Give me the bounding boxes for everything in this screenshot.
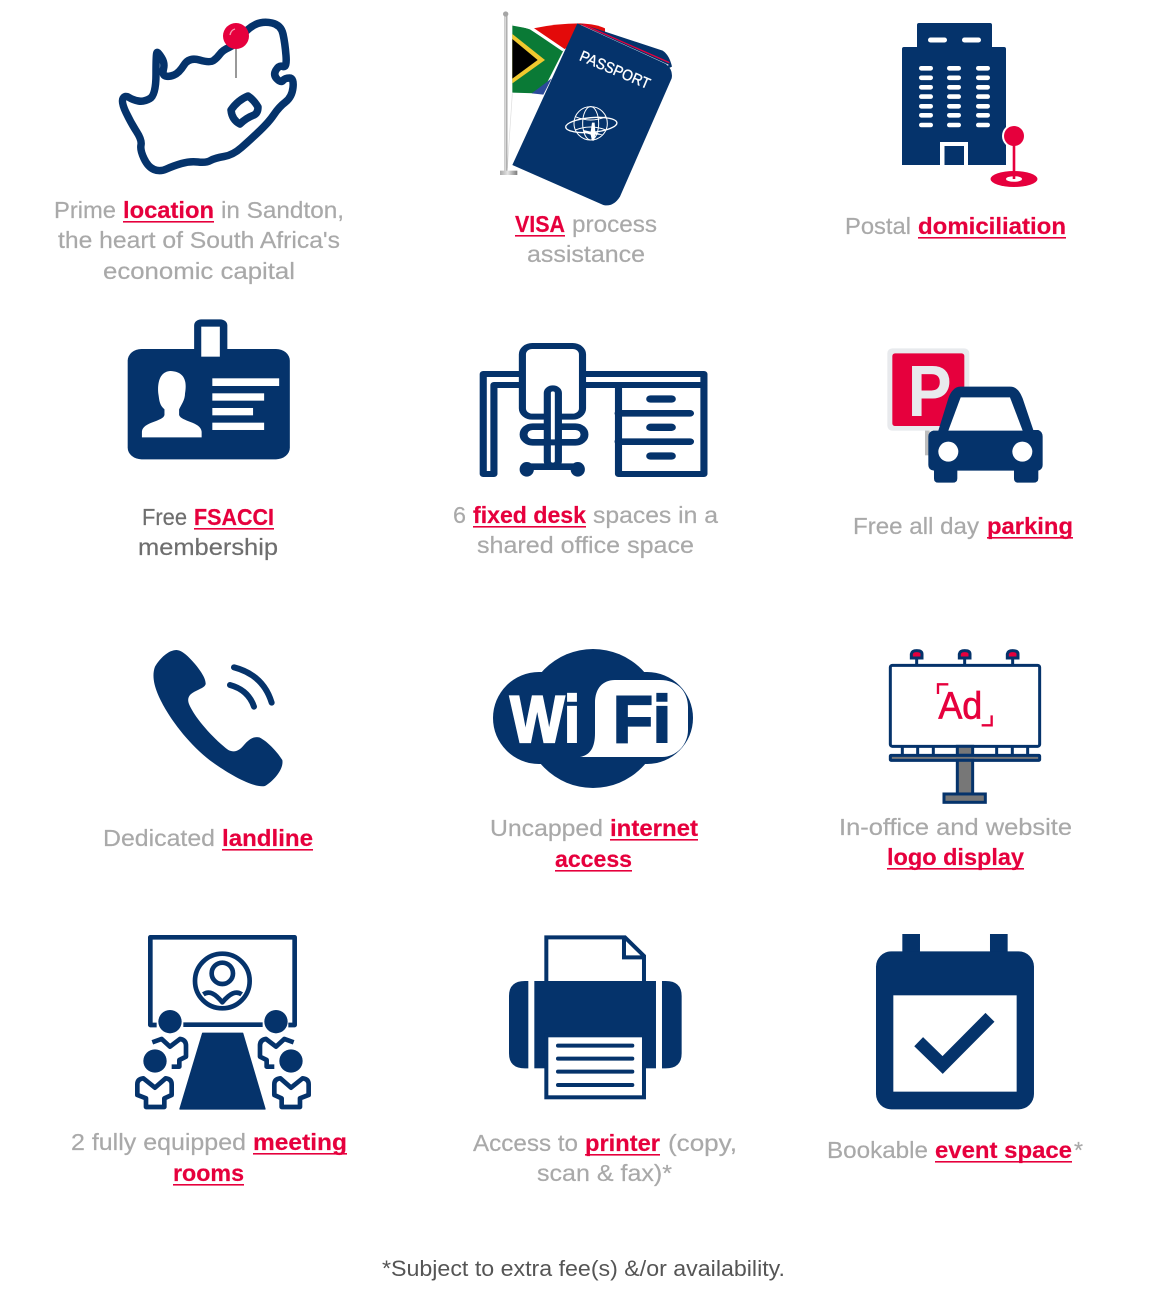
caption: internet: access xyxy=(555,846,632,872)
caption: printer: Access to xyxy=(473,1130,578,1156)
icon: desk and chair xyxy=(483,346,704,476)
caption: FSACCI: FSACCI xyxy=(194,504,274,530)
icon: ID badge xyxy=(128,319,290,459)
caption: landline xyxy=(103,825,313,851)
icon: telephone xyxy=(153,650,283,786)
label: passport: PASSPORT xyxy=(577,48,653,93)
caption: meeting rooms xyxy=(71,1129,347,1186)
caption: visa xyxy=(515,211,657,267)
caption: visa: assistance xyxy=(527,241,645,267)
caption: fixed desk: shared office space xyxy=(477,532,694,558)
caption: location: in Sandton, xyxy=(221,197,344,223)
caption: printer: scan & fax)* xyxy=(537,1160,672,1186)
icon: meeting room xyxy=(137,937,309,1109)
icon: Wi-Fi logo xyxy=(493,649,693,788)
caption: parking: parking xyxy=(987,513,1073,539)
icon: flag and passport xyxy=(500,11,672,205)
caption: internet: Uncapped xyxy=(490,815,603,841)
caption: FSACCI: membership xyxy=(138,534,278,560)
caption: parking xyxy=(853,513,1073,539)
caption: domiciliation: Postal xyxy=(845,213,911,239)
icon: printer xyxy=(509,937,682,1097)
caption: fixed desk: fixed desk xyxy=(473,502,587,528)
caption: internet xyxy=(490,815,698,872)
caption: meeting rooms: rooms xyxy=(173,1160,244,1186)
caption: internet: internet xyxy=(610,815,698,841)
caption: FSACCI xyxy=(138,504,278,560)
caption: visa: process xyxy=(572,211,657,237)
caption: meeting rooms: meeting xyxy=(253,1129,347,1155)
caption: FSACCI: Free xyxy=(142,504,187,530)
caption: location xyxy=(54,197,344,284)
caption: event space: event space xyxy=(935,1137,1072,1163)
caption: location: location xyxy=(123,197,214,223)
caption: event space xyxy=(827,1137,1083,1163)
caption: location: the heart of South Africa's xyxy=(58,227,340,253)
label: Ad: Ad xyxy=(938,685,982,727)
caption: meeting rooms: 2 fully equipped xyxy=(71,1129,246,1155)
caption: logo display: logo display xyxy=(887,844,1024,870)
icon: calendar xyxy=(876,934,1034,1109)
caption: parking: Free all day xyxy=(853,513,979,539)
caption: fixed desk xyxy=(453,502,719,558)
caption: landline: Dedicated xyxy=(103,825,215,851)
caption: fixed desk: 6 xyxy=(453,502,466,528)
caption: printer: (copy, xyxy=(668,1130,737,1156)
footnote: *Subject to extra fee(s) &/or availability. xyxy=(382,1256,785,1281)
caption: logo display: In-office and website xyxy=(839,814,1072,840)
caption: visa: VISA xyxy=(515,211,565,237)
caption: logo display xyxy=(839,814,1072,870)
caption: domiciliation xyxy=(845,213,1066,239)
icon: Wi-Fi logo: Wi xyxy=(510,682,580,756)
caption: fixed desk: spaces in a xyxy=(593,502,719,528)
icon: South Africa map with pin xyxy=(122,22,293,171)
caption: location: Prime xyxy=(54,197,116,223)
caption: printer: printer xyxy=(585,1130,660,1156)
icon: office building with pin xyxy=(902,23,1038,187)
caption: event space: * xyxy=(1074,1137,1083,1163)
caption: printer xyxy=(473,1130,737,1186)
icon: parking sign and car xyxy=(887,348,1043,483)
caption: event space: Bookable xyxy=(827,1137,928,1163)
caption: domiciliation: domiciliation xyxy=(918,213,1066,239)
icon: billboard xyxy=(890,651,1040,802)
caption: landline: landline xyxy=(222,825,313,851)
caption: location: economic capital xyxy=(103,258,295,284)
label: P: P xyxy=(908,352,952,432)
icon: Wi-Fi logo: Fi xyxy=(613,682,671,756)
